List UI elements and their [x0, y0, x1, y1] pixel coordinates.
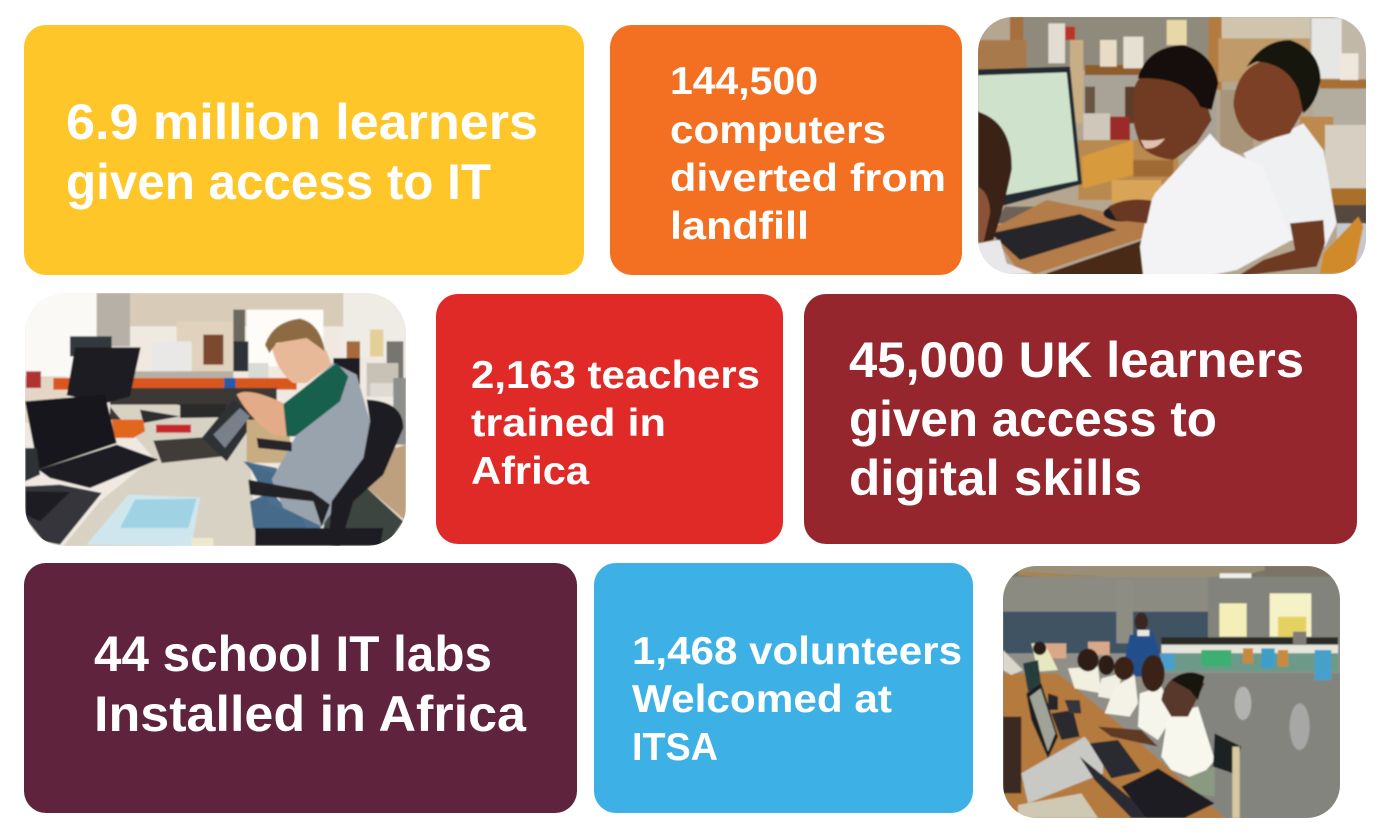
teacher: [1125, 632, 1161, 677]
photo: technician repairing a laptop: [20, 288, 420, 555]
heading: 2,163 teachers trained in Africa: Africa: [471, 450, 589, 493]
heading: 44 school IT labs installed in Africa: Installed in Africa: [94, 686, 527, 742]
heading: 144,500 computers diverted from landfill: [670, 60, 946, 248]
heading: 144,500 computers diverted from landfill: computers: [670, 109, 886, 152]
heading: 1,468 volunteers welcomed at ITSA: [632, 630, 962, 769]
heading: 1,468 volunteers welcomed at ITSA: Welcomed at: [632, 678, 892, 721]
seated students: [1031, 643, 1058, 672]
office chair: [328, 400, 403, 546]
student right: [1243, 123, 1337, 247]
photo: two students at a computer: [970, 10, 1370, 277]
heading: 2,163 teachers trained in Africa: trained in: [471, 402, 666, 445]
desk: [990, 200, 1147, 273]
back row of students: [1161, 643, 1338, 653]
desk: [63, 405, 257, 546]
panel: 1,468 volunteers: [594, 563, 973, 813]
heading: 1,468 volunteers welcomed at ITSA: 1,468 volunteers: [632, 630, 962, 673]
panel: 144,500 computers: [610, 25, 962, 275]
desk: [1003, 673, 1225, 818]
heading: 44 school IT labs installed in Africa: 44 school IT labs: [94, 626, 492, 682]
heading: 144,500 computers diverted from landfill: diverted from: [670, 157, 946, 200]
laptop under repair: [153, 437, 223, 463]
paper: [87, 495, 200, 546]
heading: 45,000 UK learners given access to digital skills: 45,000 UK learners: [849, 332, 1304, 388]
panel: 45,000 UK learners: [804, 294, 1357, 544]
panel: 44 school IT labs: [24, 563, 577, 813]
seated child in foreground: [978, 112, 1012, 243]
cupboard and floor: [247, 420, 290, 463]
panel: 6.9 million learners: [24, 25, 584, 275]
back laptop monitors: [67, 347, 141, 403]
heading: 45,000 UK learners given access to digital skills: [849, 332, 1304, 506]
heading: 2,163 teachers trained in Africa: 2,163 teachers: [471, 354, 760, 397]
heading: 6.9 million learners given access to IT: [66, 94, 538, 210]
heading: 6.9 million learners given access to IT: 6.9 million learners: [66, 94, 538, 150]
floor: [1161, 673, 1340, 818]
photo: school IT lab in Africa: [998, 560, 1348, 827]
panel: 2,163 teachers: [436, 294, 783, 544]
student centre: [1140, 133, 1292, 277]
computers: [1003, 650, 1023, 675]
heading: 45,000 UK learners given access to digital skills: given access to: [849, 391, 1217, 447]
monitor: [978, 67, 1082, 207]
heading: 44 school IT labs installed in Africa: [94, 626, 527, 742]
heading: 45,000 UK learners given access to digital skills: digital skills: [849, 450, 1142, 506]
heading: 144,500 computers diverted from landfill: landfill: [670, 205, 809, 248]
heading: 2,163 teachers trained in Africa: [471, 354, 760, 493]
technician: [243, 461, 327, 535]
heading: 144,500 computers diverted from landfill: 144,500: [670, 60, 818, 103]
heading: 6.9 million learners given access to IT: given access to IT: [66, 154, 491, 210]
heading: 1,468 volunteers welcomed at ITSA: ITSA: [632, 726, 718, 769]
chair: [1213, 733, 1241, 773]
